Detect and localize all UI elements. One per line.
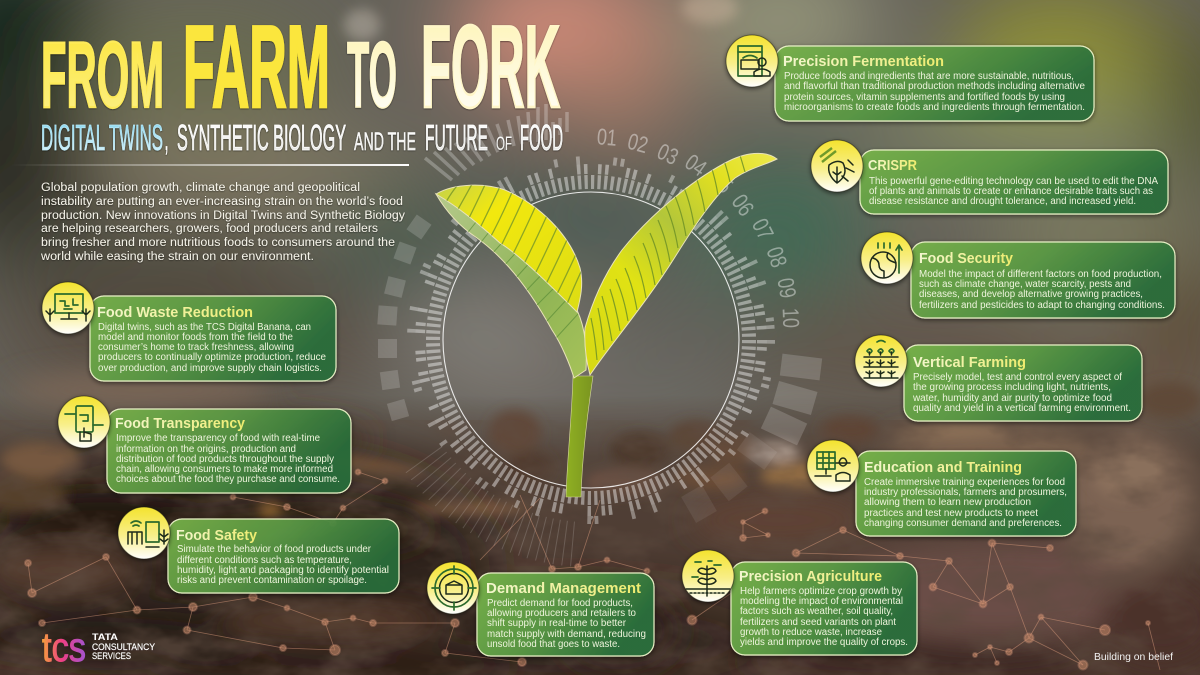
- icon: screen and farmer: [815, 452, 850, 481]
- scale numbers 01 to 10: 08: [762, 243, 792, 271]
- scale numbers 01 to 10: 05: [706, 166, 738, 198]
- icon: phone with hand: [65, 406, 103, 441]
- subtitle: DIGITAL TWINS: [41, 117, 163, 158]
- panel: Demand Management: unsold food that goes to waste.: [487, 639, 620, 650]
- panel: Precision Fermentation: microorganisms to create foods and ingredients through fermentation.: [784, 102, 1085, 113]
- panel: Education and Training: [807, 440, 1076, 536]
- left leaf: [436, 174, 587, 378]
- divider rule: [11, 164, 409, 166]
- logo: Tata Consultancy Services: TATA: [92, 632, 118, 643]
- outer long ticks upper left: [425, 104, 567, 180]
- panel: Food Transparency: Food Transparency: [115, 416, 245, 432]
- panel: Precision Agriculture: factors such as weather, soil quality,: [740, 606, 893, 617]
- panel: Precision Fermentation: [726, 35, 1094, 121]
- panel: Demand Management: allowing producers and retailers to: [487, 608, 636, 619]
- tagline: Building on belief: [1094, 652, 1173, 663]
- icon: globe and thermometer: [870, 243, 902, 278]
- panel: Education and Training: changing consumer demand and preferences.: [864, 518, 1062, 529]
- panel: Food Waste Reduction: Digital twins, such as the TCS Digital Banana, can: [98, 322, 311, 333]
- subtitle: SYNTHETIC BIOLOGY: [177, 117, 346, 158]
- text: FORK: [421, 1, 560, 132]
- panel: Demand Management: Predict demand for food products,: [487, 598, 633, 609]
- intro paragraph: instability are putting an ever-increasing strain on the world’s food: [41, 196, 403, 208]
- panel: Food Safety: Simulate the behavior of food products under: [177, 544, 372, 555]
- scale numbers 01 to 10: [596, 123, 804, 328]
- panel: Food Transparency: distribution of food products throughout the supply: [116, 454, 334, 465]
- panel: Precision Agriculture: [682, 550, 917, 655]
- panel: Food Security: Model the impact of different factors on food production,: [919, 269, 1162, 280]
- panel: Education and Training: industry professionals, farmers and prosumers,: [864, 487, 1067, 498]
- network constellation overlay: [25, 470, 1160, 670]
- panel: Precision Agriculture: fertilizers and seed variants on plant: [740, 617, 896, 628]
- panel: Demand Management: shift supply in real-time to better: [487, 618, 627, 629]
- scale numbers 01 to 10: 06: [727, 189, 759, 221]
- panel: Demand Management: match supply with demand, reducing: [487, 629, 646, 640]
- panel: Precision Agriculture: Help farmers optimize crop growth by: [740, 586, 902, 597]
- scale numbers 01 to 10: 04: [680, 149, 712, 181]
- panel: Food Safety: humidity, light and packaging to identify potential: [177, 565, 389, 576]
- large translucent squares: [377, 214, 822, 523]
- scale numbers 01 to 10: 03: [653, 138, 683, 170]
- panel: Food Waste Reduction: over production, and improve supply chain logistics.: [98, 363, 322, 374]
- text: FOOD: [520, 117, 563, 158]
- panel: Vertical Farming: water, humidity and air purity to optimize food: [912, 393, 1112, 404]
- panel: Education and Training: Create immersive training experiences for food: [864, 477, 1065, 488]
- panel: Precision Agriculture: modeling the impact of environmental: [740, 596, 903, 607]
- subtitle: OF: [496, 134, 512, 155]
- panel: Vertical Farming: the growing process including light, nutrients,: [913, 382, 1111, 393]
- intro paragraph: bring fresher and more nutritious foods to consumers around the: [41, 237, 395, 249]
- panel: Food Transparency: [58, 396, 351, 493]
- intro paragraph: Global population growth, climate change and geopolitical: [41, 182, 360, 194]
- panel: Precision Fermentation: Produce foods and ingredients that are more sustainable, nutritious,: [784, 71, 1074, 82]
- subtitle: ,: [164, 117, 169, 158]
- panel: Precision Fermentation: Precision Fermentation: [783, 54, 944, 70]
- scale numbers 01 to 10: 01: [596, 123, 618, 151]
- intro paragraph: are helping researchers, growers, food producers and retailers: [41, 223, 378, 235]
- logo: Tata Consultancy Services: [42, 624, 156, 670]
- panel: Food Safety: [118, 507, 399, 593]
- logo: Tata Consultancy Services: tcs: [42, 624, 86, 670]
- panel: Food Waste Reduction: [42, 282, 336, 381]
- scale numbers 01 to 10: 07: [747, 214, 779, 244]
- subtitle: FUTURE: [425, 117, 488, 158]
- gauge ring with tick marks and numbers: [377, 104, 822, 544]
- panel: Food Waste Reduction: model and monitor foods from the field to the: [98, 332, 293, 343]
- main title: FARM: [183, 1, 330, 132]
- seedling with two leaves: [436, 146, 777, 497]
- panel: Education and Training: practices and test new products to meet: [864, 508, 1038, 519]
- panel: Food Transparency: choices about the food they purchase and consume.: [116, 474, 340, 485]
- scale numbers 01 to 10: 09: [772, 276, 802, 300]
- panel: Food Security: fertilizers and pesticides to adapt to changing conditions.: [919, 300, 1165, 311]
- icon: leaf and DNA: [820, 148, 854, 183]
- stem: [566, 376, 593, 497]
- panel: Food Transparency: chain, allowing consumers to make more informed: [116, 464, 333, 475]
- panel: Precision Agriculture: growth to reduce waste, increase: [740, 627, 882, 638]
- scale numbers 01 to 10: 10: [778, 308, 804, 328]
- panel: Food Security: [861, 232, 1175, 318]
- panel: Vertical Farming: Precisely model, test and control every aspect of: [913, 372, 1122, 383]
- panel: Food Transparency: Improve the transparency of food with real-time: [116, 433, 320, 444]
- panel: Food Waste Reduction: Food Waste Reduction: [97, 305, 253, 321]
- panel: CRISPR: CRISPR: [868, 158, 917, 174]
- subtitle: AND THE: [354, 128, 416, 156]
- panel: Precision Fermentation: and flavorful than traditional production methods including alternative: [784, 81, 1085, 92]
- panel: Food Security: diseases, and develop alternative growing practices,: [919, 289, 1143, 300]
- icon: food safety crops and bottle: [128, 521, 168, 547]
- right leaf: [585, 146, 777, 375]
- intro paragraph: world while easing the strain on our environment.: [40, 251, 314, 263]
- icon: fermenter and operator: [738, 46, 770, 76]
- panel: Education and Training: allowing them to learn new production: [864, 497, 1031, 508]
- panel: Food Waste Reduction: consumer’s home to track freshness, allowing: [98, 342, 294, 353]
- logo: Tata Consultancy Services: CONSULTANCY: [92, 642, 156, 653]
- panel: Vertical Farming: Vertical Farming: [913, 355, 1026, 371]
- intro paragraph: [40, 182, 405, 263]
- panel: Education and Training: Education and Training: [864, 460, 1022, 476]
- scale numbers 01 to 10: 02: [625, 128, 651, 158]
- icon: target with box: [432, 566, 476, 610]
- panel: CRISPR: disease resistance and drought tolerance, and increased yield.: [869, 196, 1136, 207]
- panel: CRISPR: [811, 140, 1168, 214]
- panel: Food Waste Reduction: producers to continually optimize production, reduce: [98, 352, 326, 363]
- panel: Food Safety: Food Safety: [176, 528, 257, 544]
- panel: Demand Management: Demand Management: [486, 581, 641, 597]
- icon: digital twin monitor with plants: [46, 294, 90, 321]
- panel: Vertical Farming: [855, 335, 1142, 421]
- main title: [41, 1, 560, 132]
- panel: Food Security: such as climate change, water scarcity, pests and: [919, 279, 1131, 290]
- main title: TO: [347, 22, 397, 127]
- panel: Food Transparency: information on the origins, production and: [116, 444, 296, 455]
- panel: CRISPR: of plants and animals to create or enhance desirable traits such as: [869, 186, 1153, 197]
- logo: Tata Consultancy Services: SERVICES: [92, 651, 131, 662]
- main title: FROM: [41, 22, 164, 127]
- panel: Precision Agriculture: yields and improve the quality of crops.: [740, 637, 908, 648]
- panel: Precision Agriculture: Precision Agriculture: [739, 569, 882, 585]
- panel: Precision Fermentation: protein sources, vitamin supplements and fortified foods by using: [784, 92, 1065, 103]
- panel: Food Safety: different conditions such as temperature,: [177, 555, 352, 566]
- panel: Food Security: Food Security: [919, 251, 1013, 267]
- icon: stacked plants: [864, 340, 898, 378]
- panel: Vertical Farming: quality and yield in a vertical farming environment.: [913, 403, 1131, 414]
- intro paragraph: production. New innovations in Digital Twins and Synthetic Biology: [41, 210, 405, 222]
- panel: Demand Management: [427, 562, 654, 656]
- panel: CRISPR: This powerful gene-editing technology can be used to edit the DNA: [869, 176, 1158, 187]
- icon: plant with sensors: [686, 561, 730, 596]
- panel: Food Safety: risks and prevent contamination or spoilage.: [177, 575, 367, 586]
